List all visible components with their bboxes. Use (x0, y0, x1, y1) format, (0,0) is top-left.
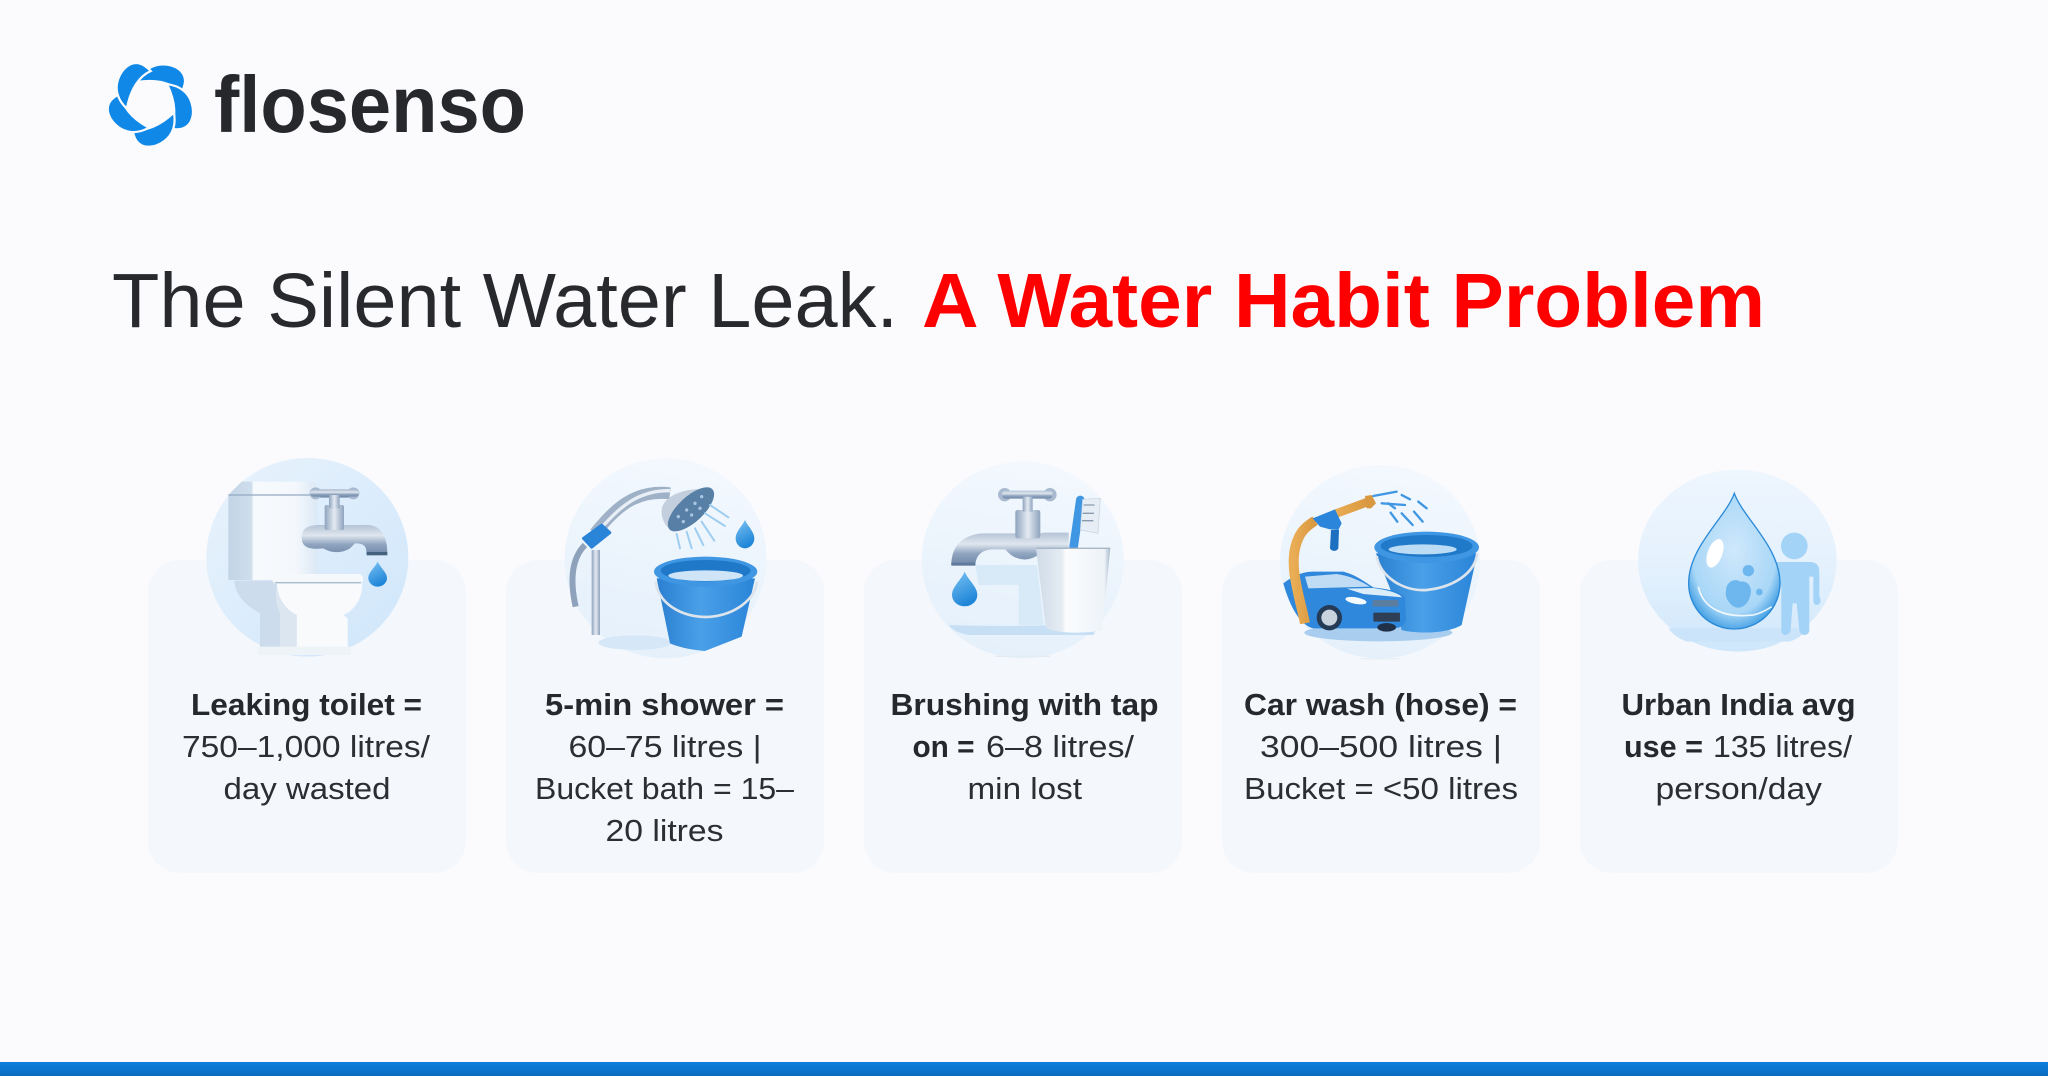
icon: water drop and person (1638, 470, 1837, 652)
title (112, 258, 1765, 344)
label text: 5-min shower = (545, 687, 784, 722)
label text: on = (912, 729, 974, 764)
label text: Brushing with tap (890, 687, 1158, 722)
icon: shower head over bucket (565, 458, 767, 658)
card background (1222, 560, 1540, 873)
logo wordmark: flosenso (214, 60, 526, 149)
title: A Water Habit Problem (922, 258, 1765, 344)
label text: 750–1,000 litres/ (182, 729, 430, 764)
label text: 135 litres/ (1713, 729, 1852, 764)
icon: hose, car and bucket (1280, 465, 1480, 659)
label text: 300–500 litres | (1260, 729, 1502, 764)
card background (1580, 560, 1898, 873)
label text: 20 litres (606, 813, 724, 848)
label text: Leaking toilet = (191, 687, 422, 722)
label text (1244, 687, 1518, 806)
card background (506, 560, 824, 873)
label text (890, 687, 1158, 806)
bottom bar (0, 1062, 2048, 1076)
label text (1622, 687, 1856, 806)
panel: car wash (1222, 465, 1540, 873)
label text: min lost (968, 771, 1082, 806)
label text (535, 687, 795, 848)
card background (148, 560, 466, 873)
label text: person/day (1656, 771, 1823, 806)
label text: 60–75 litres | (568, 729, 762, 764)
title: The Silent Water Leak. (112, 258, 898, 344)
label text: Car wash (hose) = (1244, 687, 1517, 722)
card background (864, 560, 1182, 873)
panel: urban India average use (1580, 470, 1898, 873)
label text: Bucket bath = 15– (535, 771, 795, 806)
label text: day wasted (224, 771, 390, 806)
label text: Urban India avg (1622, 687, 1856, 722)
panel: brushing with tap on (864, 462, 1182, 873)
icon: toilet with dripping tap (206, 458, 408, 657)
panel: shower and bucket (506, 458, 824, 873)
icon: flosenso swirl mark (101, 59, 198, 154)
label text: Bucket = <50 litres (1244, 771, 1518, 806)
logo (101, 59, 526, 154)
label text (182, 687, 430, 806)
panel: leaking toilet (148, 458, 466, 873)
label text: 6–8 litres/ (986, 729, 1134, 764)
icon: tap, toothbrush and cup (922, 462, 1124, 658)
label text: use = (1624, 729, 1703, 764)
